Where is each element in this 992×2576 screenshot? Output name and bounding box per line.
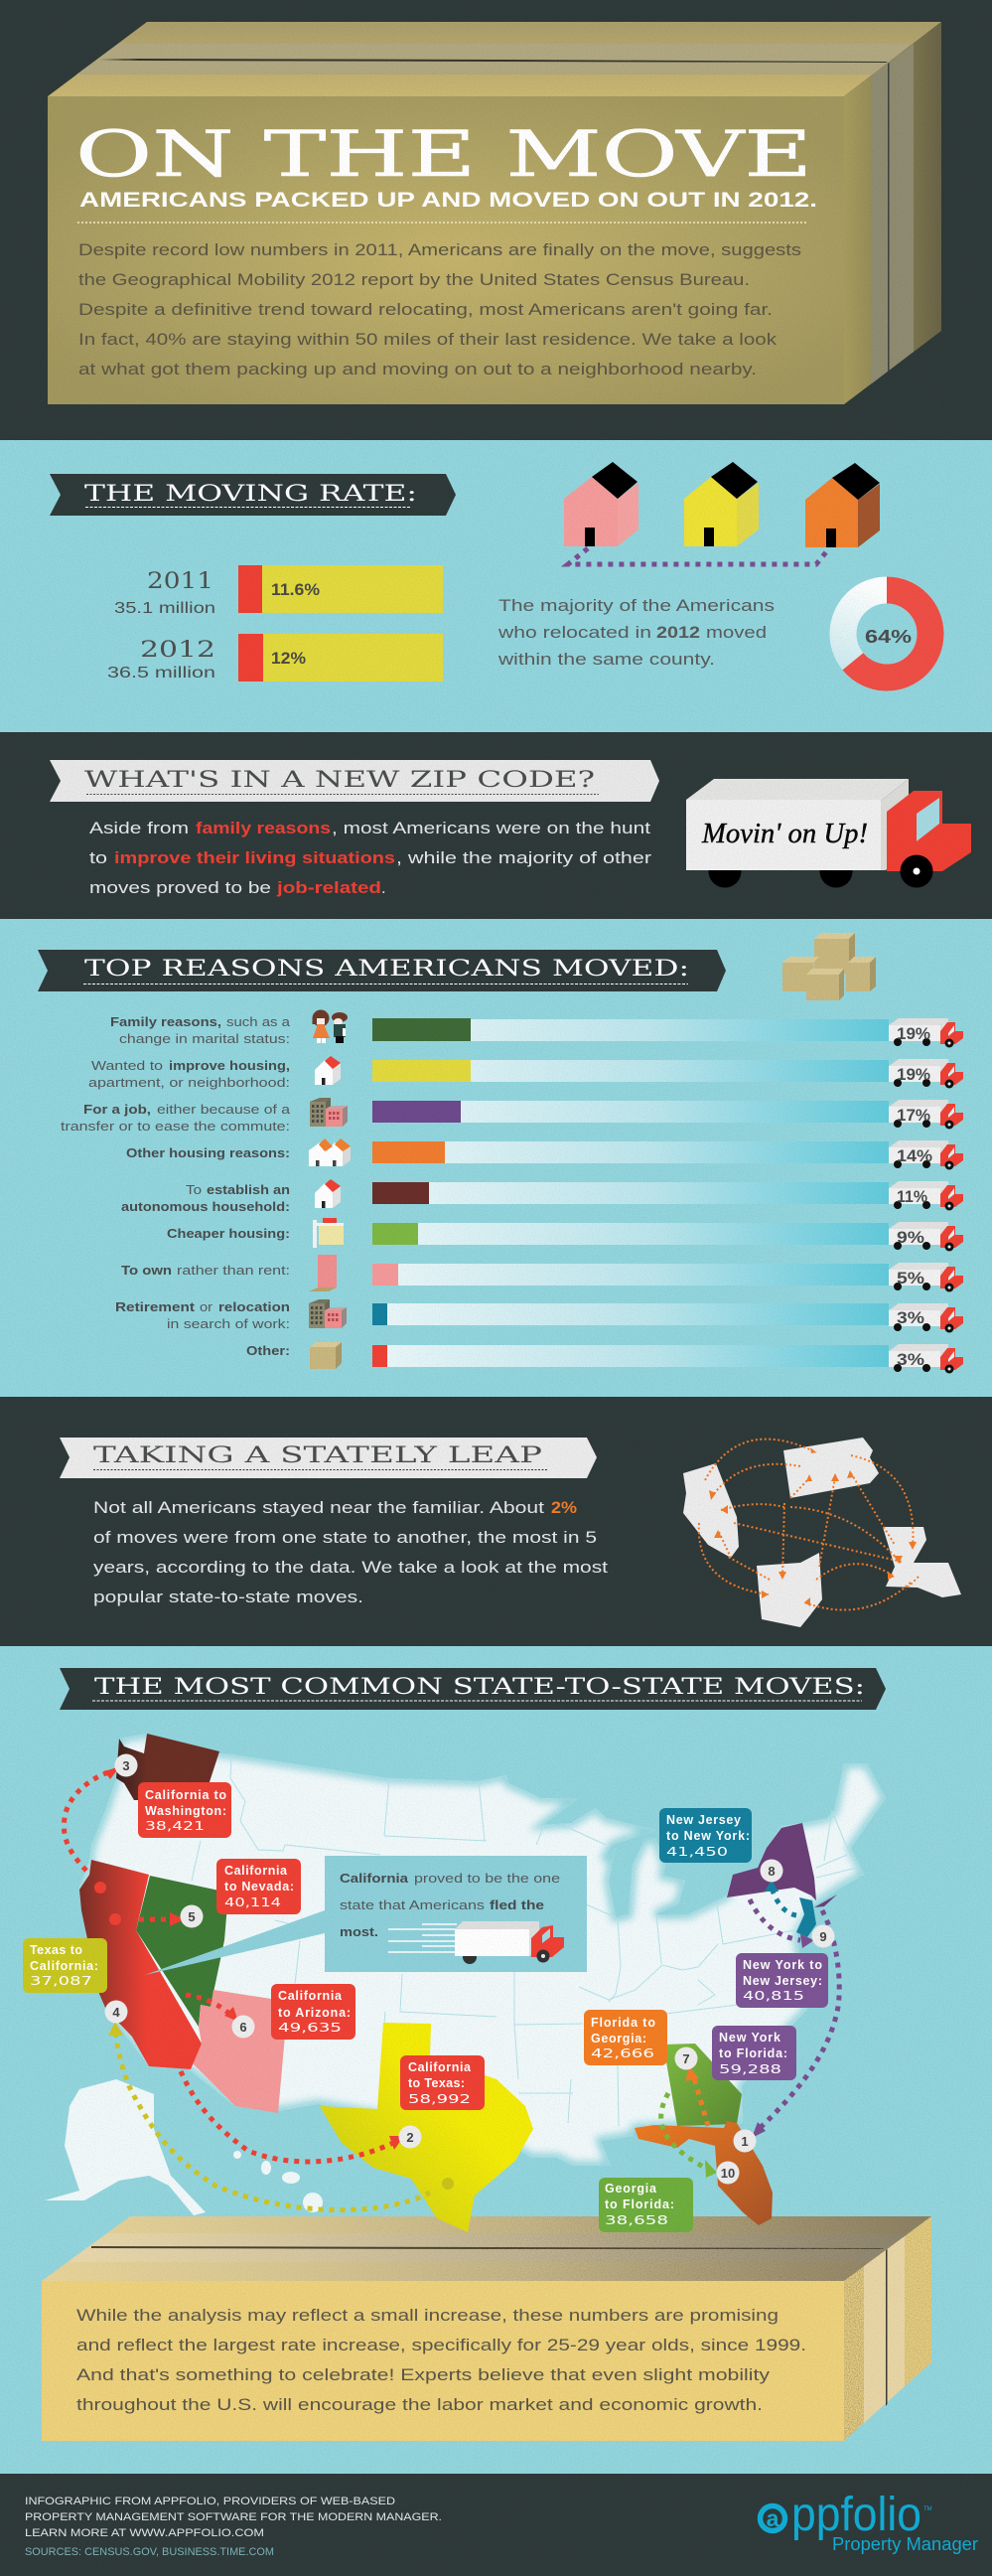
arrow: new york to florida <box>752 1910 839 2138</box>
closing text: and reflect the largest rate increase, specifically for 25-29 year olds, since 1999. <box>76 2337 806 2354</box>
heading banner: TAKING A STATELY LEAP <box>93 1443 542 1468</box>
label: new york to florida <box>712 2026 796 2080</box>
row: for a job <box>61 1098 963 1134</box>
intro text: at what got them packing up and moving on out to a neighborhood nearby. <box>78 361 757 379</box>
subtitle: AMERICANS PACKED UP AND MOVED ON OUT IN 2012. <box>79 188 817 212</box>
label: texas to california: 37,087 <box>30 1973 92 1988</box>
icon: stack of boxes <box>782 933 876 1000</box>
body text: to <box>89 849 107 867</box>
row: own rather than rent: 5% <box>897 1270 924 1288</box>
row: cheaper housing: 9% <box>897 1229 924 1247</box>
text: county majority: moved <box>706 624 767 642</box>
row: improve housing: improve housing, <box>169 1059 290 1073</box>
intro text: In fact, 40% are staying within 50 miles of their last residence. We take a look <box>78 331 778 349</box>
arrow: new jersey to new york <box>765 1880 796 1915</box>
icon: moving truck <box>686 779 971 888</box>
text: county majority: 2012 <box>656 624 700 642</box>
label: california to texas: to Texas: <box>408 2076 465 2090</box>
row: other <box>246 1342 963 1373</box>
body text: Aside from <box>89 820 189 837</box>
body text: 2% <box>551 1499 577 1517</box>
body text <box>93 1499 609 1606</box>
label: florida to georgia: 42,666 <box>591 2046 654 2060</box>
row: improve housing: apartment, or neighborhood: <box>88 1076 290 1090</box>
icon: fleeing truck <box>455 1921 564 1964</box>
heading banner <box>50 760 659 802</box>
number markers: 7 <box>682 2051 690 2066</box>
heading banner: THE MOST COMMON STATE-TO-STATE MOVES: <box>94 1675 865 1700</box>
panel: most common state-to-state moves <box>0 1646 992 2474</box>
intro text: Despite record low numbers in 2011, Americans are finally on the move, suggests <box>78 241 801 259</box>
icon: house <box>315 1179 341 1208</box>
label: new york to florida: to Florida: <box>719 2046 787 2060</box>
number markers: 1 <box>741 2134 749 2149</box>
closing text: throughout the U.S. will encourage the labor market and economic growth. <box>76 2396 763 2414</box>
row: cheaper housing <box>167 1218 963 1252</box>
row: improve housing: 19% <box>897 1066 930 1084</box>
panel: top reasons americans moved <box>0 919 992 1397</box>
closing text <box>76 2307 806 2414</box>
callout: california fled: fled the <box>490 1898 544 1912</box>
row: improve housing <box>88 1056 963 1090</box>
arrow: california to nevada <box>94 1882 185 1926</box>
box side <box>844 22 941 404</box>
icon: house <box>315 1056 341 1085</box>
heading banner <box>60 1438 597 1478</box>
row: autonomous household: To <box>186 1183 202 1197</box>
heading banner <box>60 1668 886 1710</box>
label: new york to new jersey: 40,815 <box>743 1988 804 2003</box>
logo: appfolio: a <box>767 2505 779 2531</box>
box front <box>48 96 844 404</box>
heading banner: TOP REASONS AMERICANS MOVED: <box>84 957 689 982</box>
title: ON THE MOVE <box>75 118 812 192</box>
speed lines <box>388 1924 457 1952</box>
credits: PROPERTY MANAGEMENT SOFTWARE FOR THE MODERN MANAGER. <box>25 2511 442 2523</box>
bar: 2012 <box>107 634 443 682</box>
body text: job-related <box>276 879 381 897</box>
bar: 2011: 11.6% <box>271 581 320 599</box>
bar: 2011 <box>114 565 443 617</box>
intro text: Despite a definitive trend toward relocating, most Americans aren't going far. <box>78 301 773 319</box>
callout: california fled <box>145 1856 587 1975</box>
arrow: california to washington <box>64 1766 120 1871</box>
label: california to washington: 38,421 <box>145 1818 205 1833</box>
label: new york to florida: 59,288 <box>719 2061 781 2076</box>
row: family reasons: 19% <box>897 1025 930 1043</box>
arrow: california to texas <box>170 2042 404 2162</box>
number markers: 3 <box>122 1758 130 1773</box>
row: own rather than rent: rather than rent: <box>177 1264 290 1278</box>
label: texas to california: Texas to <box>30 1943 82 1957</box>
icon: box <box>310 1342 342 1369</box>
label: california to nevada <box>216 1859 301 1914</box>
body text: improve their living situations <box>114 849 395 867</box>
label: california to washington: Washington: <box>145 1804 226 1818</box>
credits: INFOGRAPHIC FROM APPFOLIO, PROVIDERS OF WEB-BASED <box>25 2496 395 2507</box>
row: other housing reasons: Other housing reasons: <box>126 1146 290 1160</box>
number markers: 9 <box>819 1929 827 1944</box>
label: new york to new jersey: New York to <box>743 1958 822 1972</box>
icon: for-sale sign <box>313 1218 344 1248</box>
body text: , most Americans were on the hunt <box>332 820 651 837</box>
icon: couple <box>312 1009 348 1043</box>
number markers: 6 <box>239 2020 247 2035</box>
row: retirement or relocation: or <box>200 1300 213 1314</box>
callout: california fled: state that Americans <box>340 1898 485 1912</box>
row: own rather than rent <box>121 1255 963 1291</box>
row: retirement or relocation: 3% <box>897 1309 924 1327</box>
arrow: new york to new jersey <box>750 1899 814 1948</box>
row: for a job: 17% <box>897 1107 930 1125</box>
logo: appfolio: Property Manager <box>832 2534 978 2554</box>
logo: appfolio: ppfolio <box>791 2489 921 2541</box>
chart: 64% donut: 64% <box>865 626 912 647</box>
map: united states <box>45 1734 886 2232</box>
bar: 2012: 12% <box>271 650 306 668</box>
label: georgia to florida <box>599 2178 693 2232</box>
icon: door <box>309 1255 337 1291</box>
bar: 2012: 36.5 million <box>107 665 215 682</box>
body text: years, according to the data. We take a look at the most <box>93 1559 609 1577</box>
label: texas to california: California: <box>30 1959 98 1973</box>
panel: what's in a new zip code <box>0 732 992 919</box>
label: california to arizona: California <box>278 1989 343 2003</box>
number markers <box>105 1754 834 2184</box>
label: california to texas <box>400 2055 485 2110</box>
row: cheaper housing: Cheaper housing: <box>167 1227 290 1241</box>
box top flaps <box>48 22 941 96</box>
number markers: 8 <box>768 1864 776 1879</box>
number markers: 10 <box>721 2166 735 2181</box>
arrow: california to arizona <box>186 1995 238 2022</box>
label: florida to georgia: Georgia: <box>591 2032 646 2046</box>
label: california to washington: California to <box>145 1788 226 1802</box>
closing text: While the analysis may reflect a small increase, these numbers are promising <box>76 2307 779 2325</box>
row: family reasons: change in marital status: <box>119 1032 290 1046</box>
label: new jersey to new york: New Jersey <box>666 1813 741 1827</box>
heading banner <box>38 950 726 991</box>
body text: . <box>381 879 386 897</box>
text: county majority: The majority of the Americans <box>498 597 775 615</box>
row: autonomous household: 11% <box>897 1188 927 1206</box>
icon: three houses with dotted path <box>564 462 880 564</box>
heading banner: THE MOVING RATE: <box>84 482 417 507</box>
arrow: texas to california <box>108 2022 454 2209</box>
logo: appfolio: TM <box>923 2506 932 2512</box>
bar: 2011: 2011 <box>147 569 213 594</box>
label: california to washington <box>138 1782 231 1838</box>
chart: 64% donut <box>843 590 930 678</box>
icon: buildings <box>310 1098 348 1127</box>
body text: Not all Americans stayed near the familiar. About <box>93 1499 545 1517</box>
label: california to texas: California <box>408 2060 472 2074</box>
row: autonomous household: autonomous household: <box>121 1200 290 1214</box>
row: retirement or relocation: Retirement <box>115 1300 196 1314</box>
row: retirement or relocation: relocation <box>218 1300 290 1314</box>
bar: 2011: 35.1 million <box>114 600 215 617</box>
body text: of moves were from one state to another, the most in 5 <box>93 1529 597 1547</box>
row: other: Other: <box>246 1344 290 1358</box>
label: new jersey to new york <box>659 1808 752 1863</box>
icon: moving truck: Movin' on Up! <box>701 819 868 849</box>
label: california to arizona: to Arizona: <box>278 2006 351 2020</box>
callout: california fled: California <box>340 1872 409 1886</box>
row: for a job: transfer or to ease the commute: <box>61 1120 290 1134</box>
label: california to texas: 58,992 <box>408 2091 471 2106</box>
label: new jersey to new york: 41,450 <box>666 1844 728 1859</box>
number markers: 5 <box>188 1909 196 1924</box>
row: improve housing: Wanted to <box>91 1059 163 1073</box>
body text: family reasons <box>196 820 331 837</box>
credits <box>25 2496 442 2558</box>
callout: california fled: most. <box>340 1925 378 1939</box>
row: autonomous household <box>121 1179 963 1214</box>
row: other housing reasons <box>126 1138 963 1170</box>
icon: buildings <box>309 1299 347 1328</box>
label: california to arizona <box>271 1984 355 2040</box>
label: new york to new jersey <box>736 1953 828 2008</box>
intro text <box>78 241 801 379</box>
number markers: 2 <box>406 2130 414 2145</box>
credits: LEARN MORE AT WWW.APPFOLIO.COM <box>25 2527 264 2539</box>
label: georgia to florida: 38,658 <box>605 2212 668 2227</box>
panel: taking a stately leap <box>0 1397 992 1646</box>
row: family reasons: Family reasons, <box>110 1015 221 1029</box>
number markers: 4 <box>112 2005 120 2020</box>
text: county majority <box>497 597 775 669</box>
label: georgia to florida: to Florida: <box>605 2197 674 2211</box>
row: family reasons: such as a <box>226 1015 290 1029</box>
credits: SOURCES: CENSUS.GOV, BUSINESS.TIME.COM <box>25 2546 274 2558</box>
panel: the moving rate <box>0 440 992 732</box>
closing box <box>42 2216 931 2441</box>
heading banner: WHAT'S IN A NEW ZIP CODE? <box>84 768 595 793</box>
heading banner <box>50 474 456 516</box>
text: county majority: within the same county. <box>497 651 715 669</box>
row: family reasons <box>110 1009 963 1047</box>
row: own rather than rent: To own <box>121 1264 172 1278</box>
intro text: the Geographical Mobility 2012 report by the United States Census Bureau. <box>78 271 750 289</box>
row: other housing reasons: 14% <box>897 1147 932 1165</box>
label: california to nevada: to Nevada: <box>224 1880 294 1894</box>
body text: moves proved to be <box>89 879 271 897</box>
label: california to nevada: California <box>224 1864 288 1878</box>
label: california to nevada: 40,114 <box>224 1894 281 1909</box>
arrow: georgia to florida <box>661 2093 717 2178</box>
label: georgia to florida: Georgia <box>605 2182 657 2196</box>
label: florida to georgia <box>584 2010 667 2065</box>
row: retirement or relocation: in search of work: <box>167 1317 290 1331</box>
logo: appfolio <box>761 2489 978 2554</box>
callout: california fled: proved to be the one <box>414 1872 560 1886</box>
body text: , while the majority of other <box>396 849 652 867</box>
label: california to arizona: 49,635 <box>278 2020 342 2035</box>
bar: 2012: 2012 <box>140 638 215 663</box>
body text: popular state-to-state moves. <box>93 1589 363 1606</box>
text: county majority: who relocated in <box>497 624 651 642</box>
arrow: florida to georgia <box>685 2066 708 2126</box>
body text <box>89 820 652 897</box>
label: new jersey to new york: to New York: <box>666 1829 750 1843</box>
closing text: And that's something to celebrate! Experts believe that even slight mobility <box>76 2366 771 2384</box>
panel: hero moving box <box>0 0 992 440</box>
label: texas to california <box>23 1938 107 1993</box>
row: for a job: For a job, <box>83 1103 151 1117</box>
row: other: 3% <box>897 1351 924 1369</box>
row: retirement or relocation <box>115 1299 963 1333</box>
label: florida to georgia: Florida to <box>591 2016 655 2030</box>
row: for a job: either because of a <box>157 1103 290 1117</box>
row: autonomous household: establish an <box>207 1183 290 1197</box>
icon: states with dotted arrows <box>683 1438 961 1627</box>
panel: footer <box>0 2474 992 2576</box>
icon: two houses <box>309 1138 351 1166</box>
label: new york to new jersey: New Jersey: <box>743 1974 822 1988</box>
label: new york to florida: New York <box>719 2031 780 2045</box>
